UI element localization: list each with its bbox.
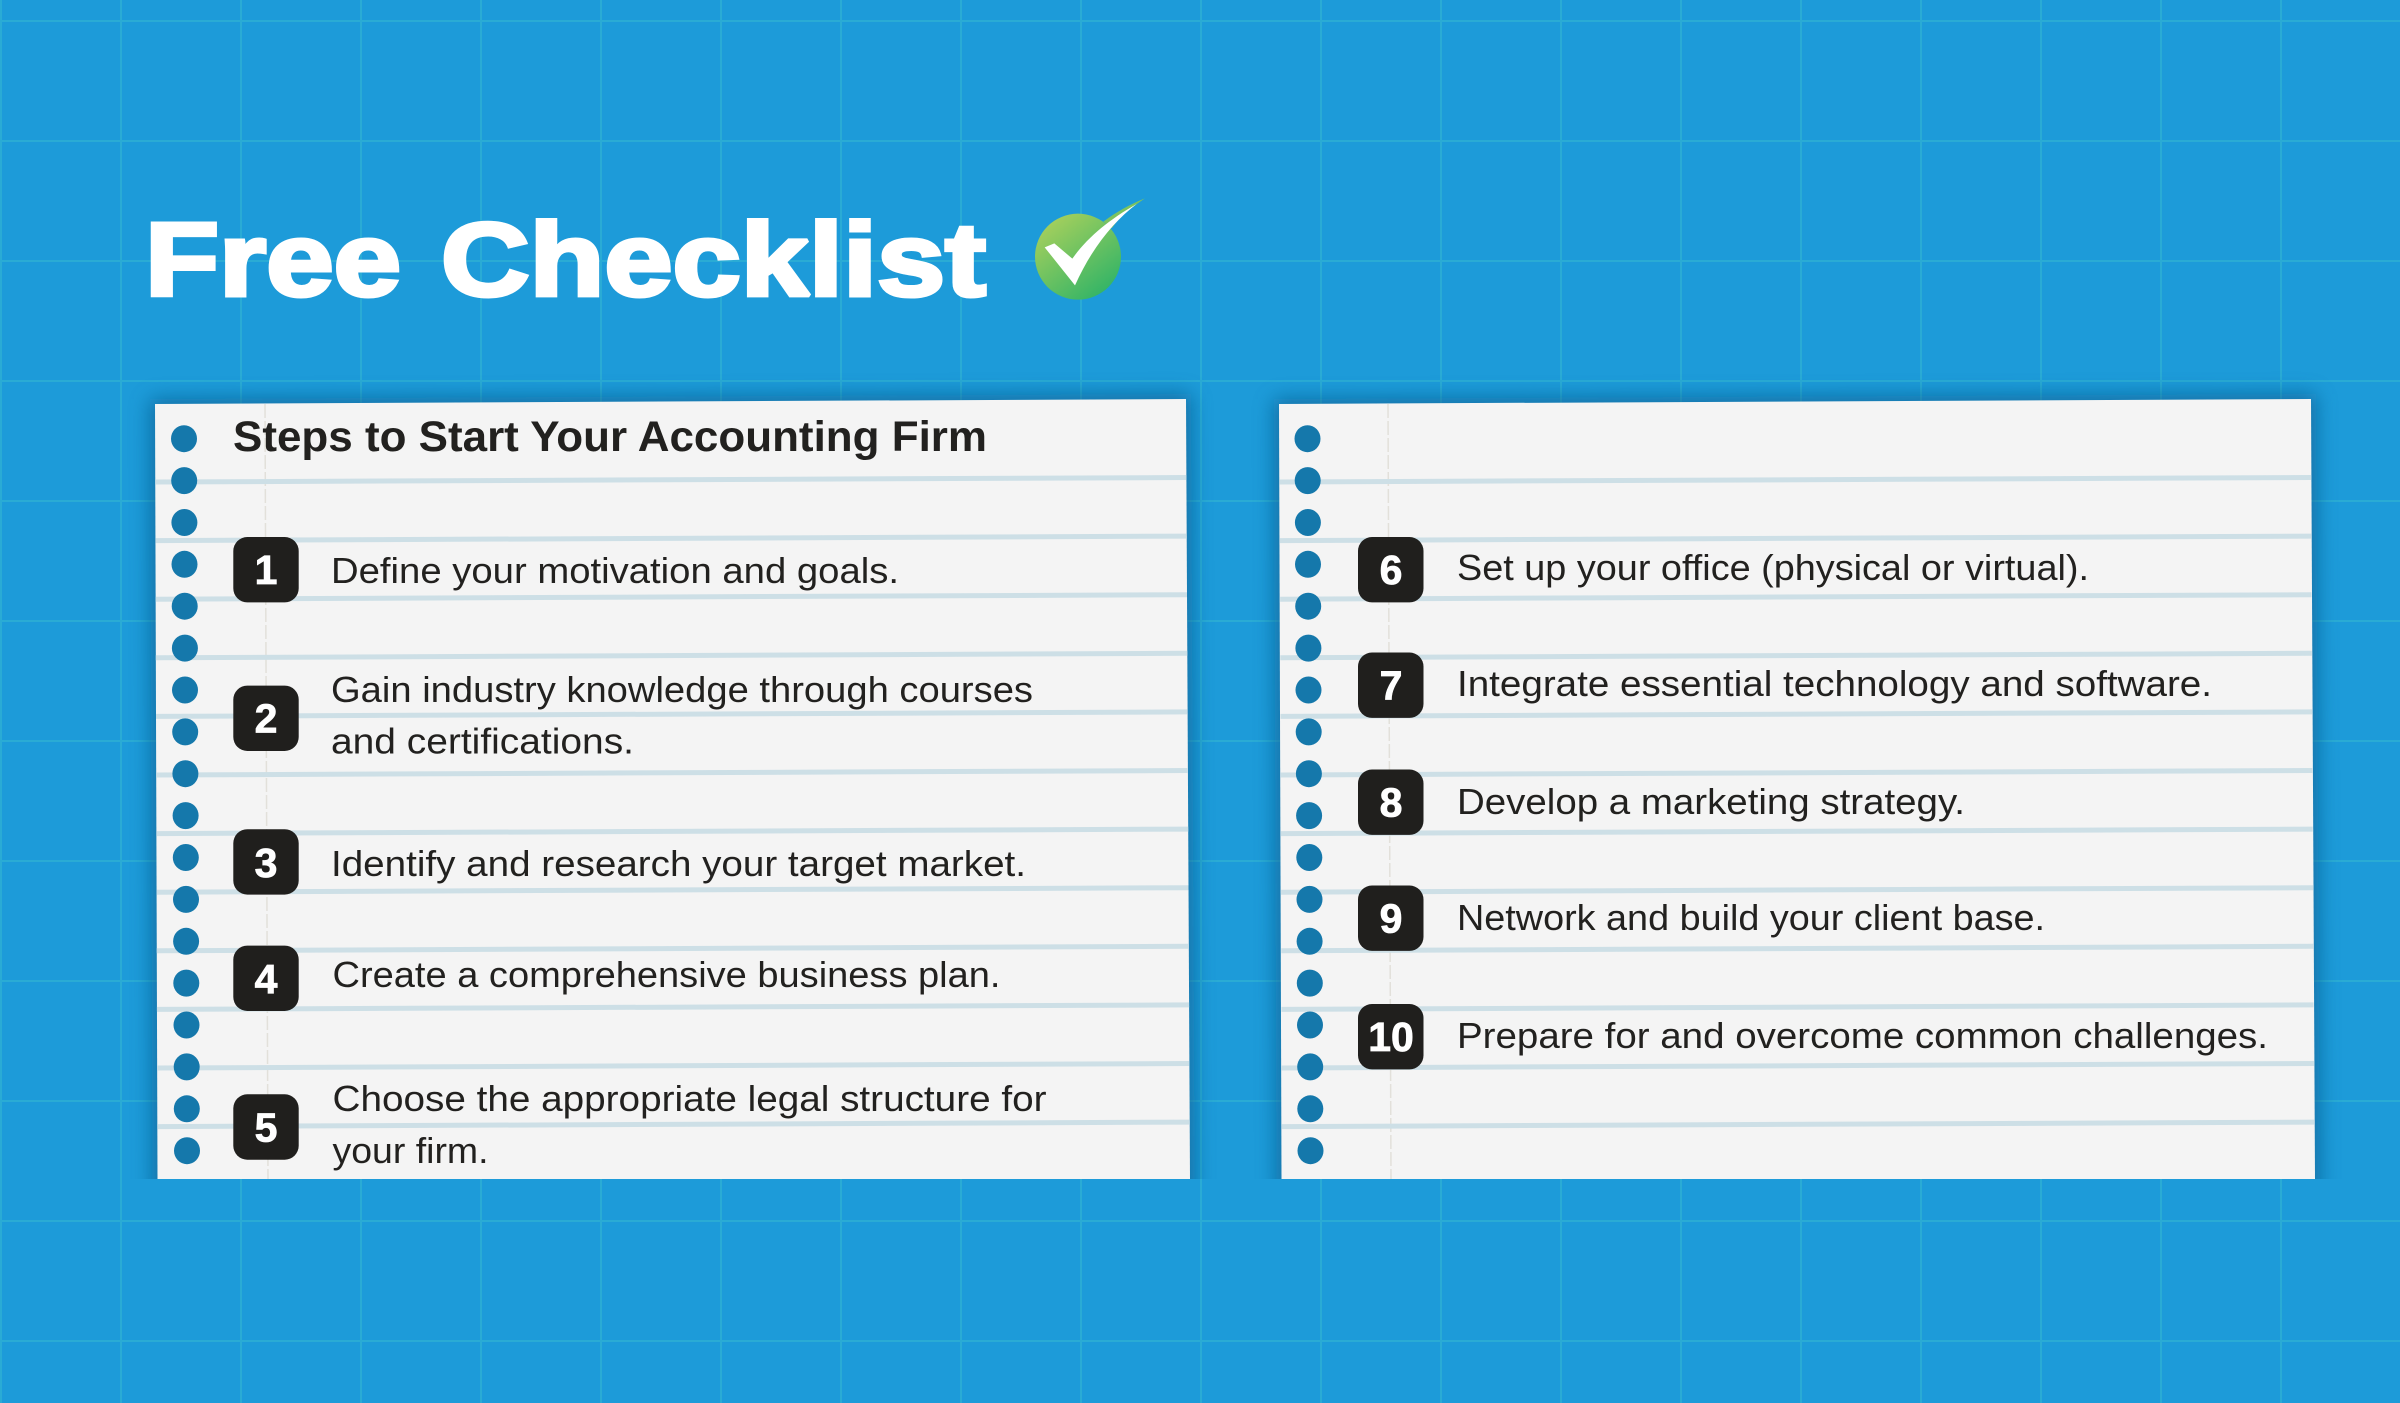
step 5: Choose the appropriate legal structure for <box>332 1078 1047 1119</box>
step 10: 10 <box>1368 1014 1414 1060</box>
icon: green check mark <box>1035 198 1145 300</box>
step 10: Prepare for and overcome common challenges. <box>1457 1015 2268 1056</box>
step 8: 8 <box>1380 780 1402 826</box>
step 3: Identify and research your target market. <box>331 843 1026 884</box>
panel: right notebook page <box>1274 394 2320 1230</box>
step 2: Gain industry knowledge through courses <box>331 669 1033 710</box>
step 2 <box>233 676 1032 754</box>
heading: Steps to Start Your Accounting Firm <box>233 413 987 461</box>
step 4: 4 <box>255 956 278 1002</box>
step 7: Integrate essential technology and software. <box>1457 663 2212 704</box>
step 9 <box>1358 886 2045 951</box>
title: Free <box>145 202 401 318</box>
step 5: your firm. <box>332 1130 488 1171</box>
step 1: 1 <box>255 547 277 593</box>
step 6: 6 <box>1380 547 1402 593</box>
step 5: 5 <box>255 1104 277 1150</box>
step 3 <box>233 829 1026 895</box>
step 9: Network and build your client base. <box>1457 897 2045 938</box>
step 5 <box>233 1078 1047 1171</box>
step 1 <box>233 537 899 602</box>
title <box>145 202 986 318</box>
step 8 <box>1358 770 1965 835</box>
step 4 <box>233 946 1001 1011</box>
step 9: 9 <box>1380 896 1402 942</box>
binder holes right <box>1294 425 1324 1164</box>
step 7: 7 <box>1380 662 1402 708</box>
step 10 <box>1358 1004 2268 1069</box>
step 6 <box>1358 537 2089 602</box>
panel: left notebook page <box>150 394 1195 1230</box>
step 8: Develop a marketing strategy. <box>1457 781 1965 822</box>
step 7 <box>1358 652 2212 718</box>
step 4: Create a comprehensive business plan. <box>332 954 1000 995</box>
step 6: Set up your office (physical or virtual). <box>1457 547 2089 588</box>
step 3: 3 <box>255 840 277 886</box>
title: Checklist <box>441 202 986 318</box>
step 2: and certifications. <box>331 720 634 762</box>
binder holes left <box>171 425 200 1164</box>
step 2: 2 <box>255 695 277 741</box>
step 1: Define your motivation and goals. <box>331 550 899 591</box>
